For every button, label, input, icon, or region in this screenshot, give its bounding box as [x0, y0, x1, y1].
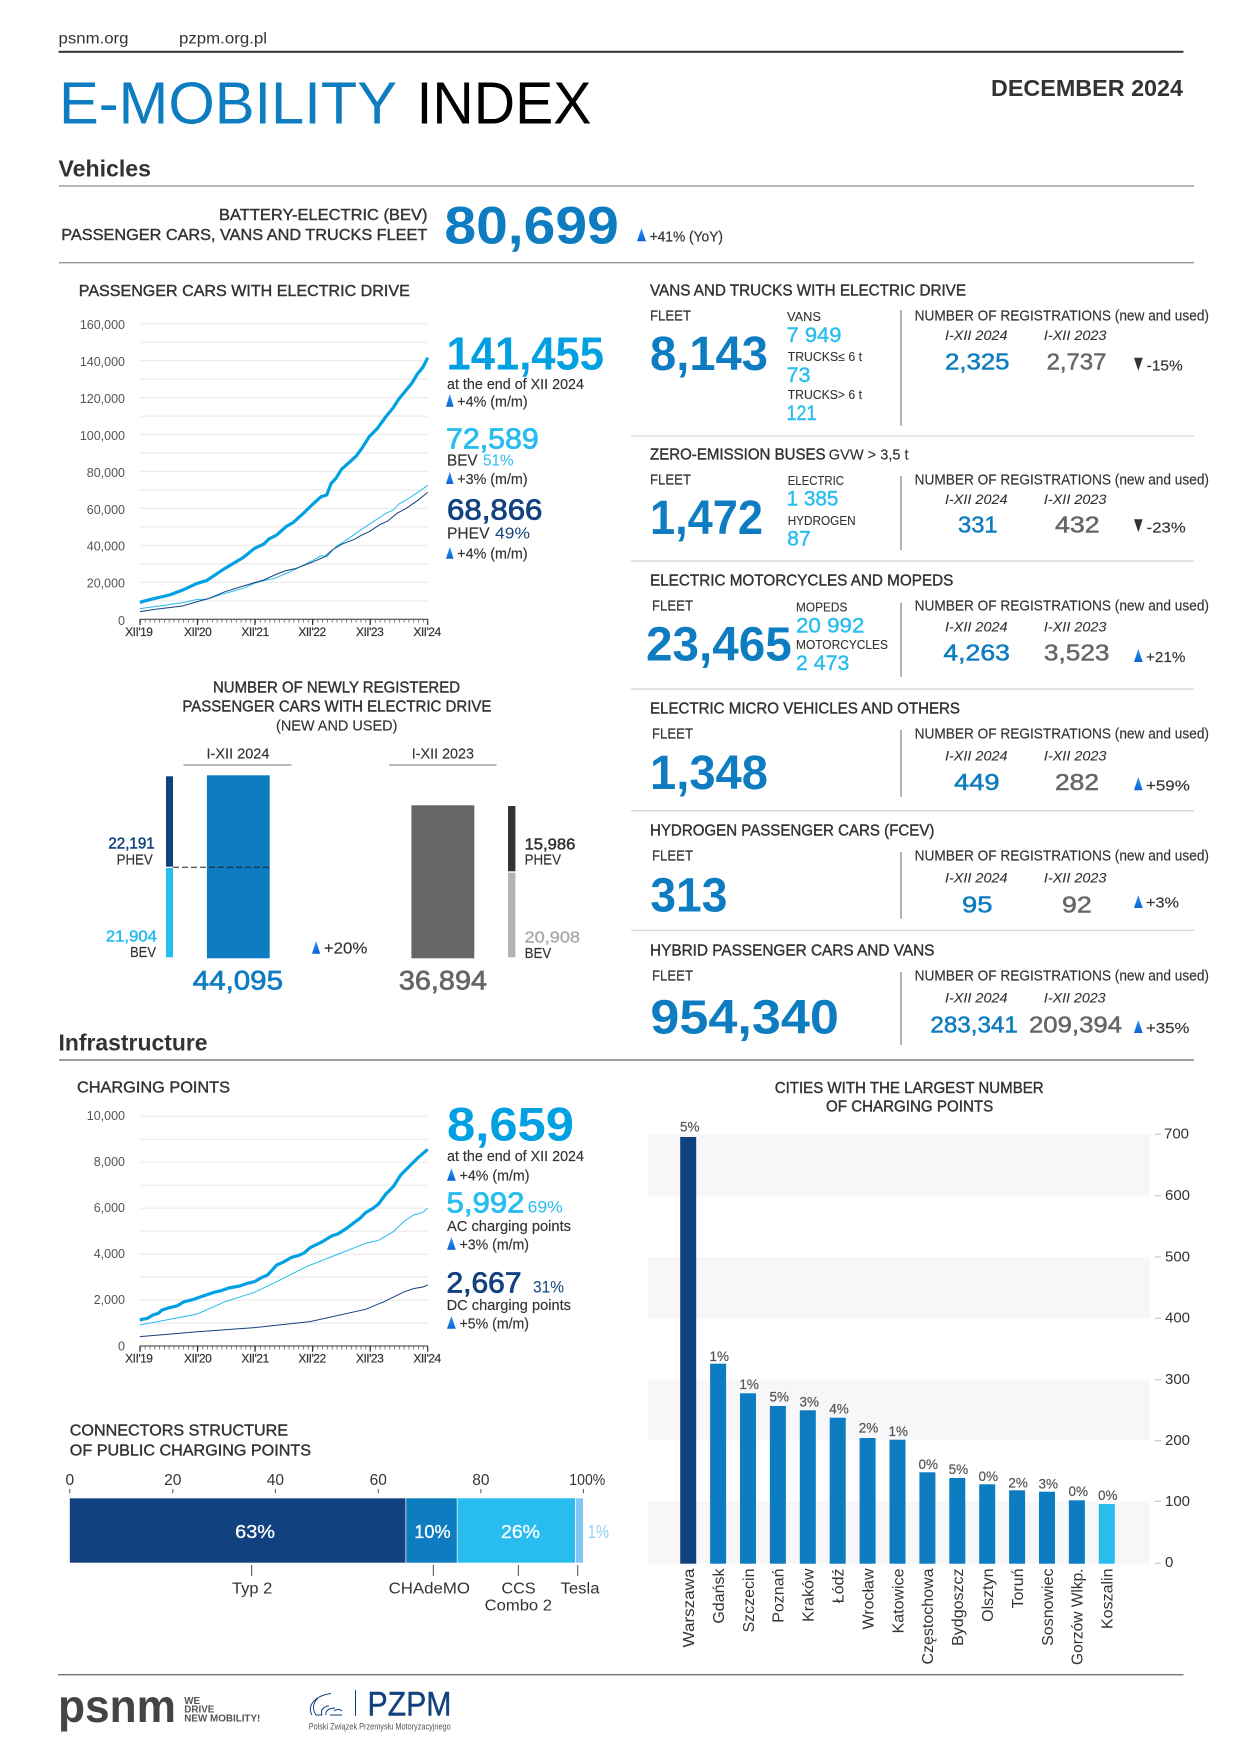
stat: AC charging points: AC charging points	[447, 1219, 571, 1235]
line chart: charging points: XII'23	[356, 1351, 384, 1365]
stacked bar chart: 80	[472, 1472, 490, 1489]
stat: PHEV	[446, 494, 542, 563]
stacked bar chart: 26%	[501, 1521, 540, 1542]
panel: zero-emission buses: 1,472	[650, 492, 763, 545]
stacked bar chart: CCS	[502, 1581, 536, 1598]
line chart: charging points: XII'24	[413, 1351, 441, 1365]
panel: motorcycles and mopeds: I-XII 2024	[945, 618, 1008, 634]
stat: DC charging points: +5% (m/m)	[460, 1317, 529, 1333]
bar chart: cities: 3%	[1039, 1477, 1058, 1492]
panel: motorcycles and mopeds: 20 992	[796, 615, 864, 638]
panel: vans and trucks	[650, 282, 1209, 426]
bar chart: cities: Gorzów Wlkp.	[1070, 1568, 1087, 1665]
panel: connectors structure: OF PUBLIC CHARGING POINTS	[70, 1442, 311, 1459]
panel: hydrogen cars: 313	[650, 870, 727, 923]
panel: vans and trucks: -15%	[1147, 358, 1183, 375]
bar chart: cities: Katowice	[890, 1568, 907, 1633]
panel: cities: CITIES WITH THE LARGEST NUMBER	[775, 1080, 1044, 1097]
panel: hybrid cars and vans: NUMBER OF REGISTRATIONS (new and used)	[915, 967, 1209, 984]
bar 2024: PHEV	[117, 852, 153, 869]
bar chart: cities: 300	[1165, 1371, 1190, 1388]
panel: hydrogen cars	[650, 823, 1209, 923]
website links: psnm.org	[58, 30, 128, 47]
line chart: passenger cars: 40,000	[87, 540, 125, 554]
panel: micro vehicles: 449	[954, 769, 1000, 795]
panel: connectors structure: CONNECTORS STRUCTURE	[70, 1423, 288, 1440]
bar chart: cities: 0%	[1068, 1484, 1088, 1499]
logo: PZPM: PZPM	[368, 1686, 452, 1724]
panel: cities: OF CHARGING POINTS	[826, 1099, 993, 1116]
bar 2023: 20,908	[525, 930, 580, 946]
line chart: passenger cars: 160,000	[80, 318, 125, 332]
panel: hybrid cars and vans: 209,394	[1029, 1012, 1122, 1038]
panel: vans and trucks: VANS	[787, 310, 821, 324]
line chart: charging points: XII'22	[298, 1351, 326, 1365]
bar chart: cities: Poznań	[771, 1568, 788, 1623]
website links	[58, 30, 267, 47]
panel: micro vehicles: ELECTRIC MICRO VEHICLES AND OTHERS	[650, 701, 960, 718]
website links: pzpm.org.pl	[179, 30, 267, 47]
panel: micro vehicles: I-XII 2023	[1044, 748, 1107, 764]
bar chart: cities: Koszalin	[1100, 1568, 1117, 1629]
panel: motorcycles and mopeds: FLEET	[652, 597, 693, 614]
bar 2023: 36,894	[399, 965, 487, 995]
bar 2023: 15,986	[525, 836, 575, 853]
line chart: passenger cars: 80,000	[87, 466, 125, 480]
panel: hybrid cars and vans: I-XII 2023	[1044, 990, 1106, 1006]
panel: hydrogen cars: NUMBER OF REGISTRATIONS (new and used)	[915, 847, 1209, 864]
line chart: charging points: 10,000	[87, 1109, 125, 1123]
panel: motorcycles and mopeds: I-XII 2023	[1044, 618, 1107, 634]
line chart: passenger cars: XII'19	[125, 625, 153, 639]
panel: hybrid cars and vans: +35%	[1146, 1020, 1189, 1037]
panel: micro vehicles: 1,348	[650, 747, 768, 800]
title	[59, 70, 592, 136]
line chart: charging points: 0	[118, 1339, 125, 1353]
line chart: passenger cars	[80, 318, 441, 639]
stacked bar chart: Typ 2	[232, 1581, 272, 1598]
stat: total charging points: 8,659	[447, 1098, 574, 1151]
bar 2023	[399, 805, 580, 995]
bar chart: cities: Sosnowiec	[1040, 1568, 1057, 1646]
panel: vans and trucks: TRUCKS≤ 6 t	[788, 350, 863, 364]
panel: micro vehicles: 282	[1055, 769, 1099, 795]
panel: motorcycles and mopeds: ELECTRIC MOTORCYCLES AND MOPEDS	[650, 573, 953, 590]
panel: newly registered passenger cars: I-XII 2024	[206, 746, 269, 763]
bar chart: cities: Wrocław	[860, 1568, 877, 1630]
panel: hydrogen cars: I-XII 2023	[1044, 870, 1107, 886]
panel: motorcycles and mopeds: 23,465	[646, 619, 792, 672]
bar chart: cities: Olsztyn	[980, 1568, 997, 1622]
logo: psnm: NEW MOBILITY!	[184, 1713, 260, 1724]
stat: AC charging points: 5,992	[446, 1188, 524, 1220]
panel: hybrid cars and vans: I-XII 2024	[945, 990, 1008, 1006]
stacked bar chart: 10%	[414, 1521, 451, 1542]
panel: motorcycles and mopeds: +21%	[1146, 649, 1185, 666]
panel: zero-emission buses: ELECTRIC	[788, 474, 844, 488]
stacked bar chart: 20	[164, 1472, 182, 1489]
bar chart: cities: 400	[1165, 1310, 1190, 1327]
stat: total: 141,455	[446, 327, 604, 379]
panel: zero-emission buses: NUMBER OF REGISTRATIONS (new and used)	[915, 471, 1209, 488]
stacked bar chart: 63%	[235, 1521, 275, 1542]
bar 2024: 44,095	[193, 965, 283, 995]
panel: hydrogen cars: HYDROGEN PASSENGER CARS (FCEV)	[650, 823, 934, 840]
panel: passenger cars with electric drive: PASSENGER CARS WITH ELECTRIC DRIVE	[79, 283, 410, 300]
panel: motorcycles and mopeds: 2 473	[796, 652, 849, 675]
panel: micro vehicles: FLEET	[652, 725, 693, 742]
line chart: passenger cars: 0	[118, 614, 125, 628]
panel: zero-emission buses: 1 385	[786, 488, 838, 511]
bar 2023: PHEV	[525, 852, 561, 869]
bar chart: cities: 200	[1165, 1432, 1190, 1449]
bar 2024: 21,904	[106, 929, 157, 946]
stat: BEV: 72,589	[446, 423, 539, 455]
panel: vans and trucks: 73	[786, 364, 810, 387]
panel: vans and trucks: I-XII 2023	[1044, 327, 1107, 343]
line chart: charging points: XII'20	[184, 1351, 212, 1365]
panel: charging points: CHARGING POINTS	[77, 1080, 230, 1097]
panel: zero-emission buses: 87	[787, 527, 811, 550]
panel: motorcycles and mopeds: MOPEDS	[796, 601, 847, 615]
bar chart: cities: 5%	[949, 1462, 968, 1477]
logo: psnm: WE	[184, 1696, 200, 1707]
line chart: passenger cars: XII'22	[298, 625, 326, 639]
panel: hydrogen cars: FLEET	[652, 847, 693, 864]
bar chart: cities: 0%	[918, 1457, 938, 1472]
panel: vans and trucks: 2,325	[945, 348, 1010, 374]
panel: micro vehicles: I-XII 2024	[945, 748, 1008, 764]
panel: micro vehicles: NUMBER OF REGISTRATIONS (new and used)	[915, 725, 1209, 742]
header	[58, 30, 1184, 136]
line chart: charging points: 4,000	[94, 1247, 125, 1261]
panel: micro vehicles	[650, 701, 1209, 800]
panel: zero-emission buses	[650, 447, 1209, 550]
stacked bar chart: 1%	[588, 1521, 609, 1542]
bar 2023: BEV	[525, 945, 551, 962]
bar chart: cities: Gdańsk	[711, 1568, 728, 1624]
title: INDEX	[416, 70, 592, 136]
logo: psnm: DRIVE	[184, 1705, 215, 1716]
bar chart: cities: 0%	[979, 1469, 998, 1484]
headline stat: BEV fleet: 80,699	[444, 196, 619, 255]
panel: motorcycles and mopeds: 4,263	[943, 640, 1010, 666]
stat: BEV: 51%	[483, 453, 514, 470]
panel: vans and trucks: FLEET	[650, 307, 691, 324]
panel: motorcycles and mopeds: MOTORCYCLES	[796, 638, 888, 652]
bar chart: cities: Bydgoszcz	[950, 1568, 967, 1646]
panel: cities	[648, 1080, 1190, 1665]
bar chart: cities	[648, 1120, 1190, 1665]
bar chart: cities: 1%	[889, 1424, 908, 1439]
panel: connectors structure	[65, 1423, 609, 1614]
panel: passenger cars with electric drive	[79, 283, 604, 639]
panel: motorcycles and mopeds: NUMBER OF REGISTRATIONS (new and used)	[915, 597, 1209, 614]
stacked bar chart	[65, 1472, 609, 1614]
line chart: charging points: 6,000	[94, 1201, 125, 1215]
logo: psnm	[58, 1680, 260, 1732]
change indicator: +20%	[324, 941, 368, 958]
chart title	[182, 680, 491, 734]
panel: hybrid cars and vans: 283,341	[930, 1012, 1018, 1038]
bar chart: cities: Warszawa	[681, 1568, 698, 1648]
line chart: passenger cars: XII'21	[241, 625, 269, 639]
stat: total	[446, 327, 604, 411]
stat: BEV	[446, 423, 539, 488]
panel: motorcycles and mopeds	[646, 573, 1209, 677]
line chart: passenger cars: XII'20	[184, 625, 212, 639]
stacked bar chart: Tesla	[560, 1581, 600, 1598]
panel: micro vehicles: +59%	[1146, 777, 1190, 794]
panel: motorcycles and mopeds: 3,523	[1044, 640, 1110, 666]
stat: DC charging points: DC charging points	[447, 1298, 571, 1314]
line chart: passenger cars: XII'24	[413, 625, 441, 639]
bar 2024: BEV	[130, 944, 156, 961]
line chart: charging points: 2,000	[94, 1293, 125, 1307]
panel: zero-emission buses: FLEET	[650, 471, 691, 488]
bar chart: cities: 500	[1165, 1248, 1190, 1265]
panel: hydrogen cars: +3%	[1146, 894, 1179, 911]
headline stat: BEV fleet	[61, 196, 723, 255]
panel: vans and trucks: 121	[786, 402, 816, 425]
stat: AC charging points: +3% (m/m)	[460, 1238, 529, 1254]
bar chart: cities: 2%	[859, 1421, 878, 1436]
stat: PHEV: PHEV	[447, 526, 490, 543]
line chart: charging points	[87, 1109, 441, 1365]
chart title: (NEW AND USED)	[276, 717, 397, 734]
panel: hydrogen cars: I-XII 2024	[945, 870, 1008, 886]
stacked bar chart: CHAdeMO	[389, 1581, 470, 1598]
panel: zero-emission buses: 432	[1055, 512, 1100, 538]
panel: zero-emission buses: GVW > 3,5 t	[829, 447, 909, 464]
stacked bar chart: 0	[65, 1472, 74, 1489]
panel: hydrogen cars: 92	[1062, 892, 1092, 918]
panel: zero-emission buses: 331	[958, 512, 998, 538]
stacked bar chart: 40	[267, 1472, 284, 1489]
bar chart: cities: 0	[1165, 1554, 1173, 1571]
panel: hydrogen cars: 95	[962, 892, 992, 918]
bar chart: cities: 1%	[709, 1349, 729, 1364]
bar chart: cities: 1%	[739, 1377, 759, 1392]
bar chart: cities: 2%	[1008, 1475, 1028, 1490]
line chart: passenger cars: 60,000	[87, 503, 125, 517]
stat: total: at the end of XII 2024	[447, 377, 584, 393]
chart title: PASSENGER CARS WITH ELECTRIC DRIVE	[182, 699, 491, 716]
line chart: passenger cars: XII'23	[356, 625, 384, 639]
headline stat: BEV fleet: +41% (YoY)	[650, 228, 723, 245]
stacked bar chart: Combo 2	[485, 1597, 552, 1614]
bar chart: cities: Szczecin	[741, 1568, 758, 1633]
panel: vans and trucks: TRUCKS> 6 t	[788, 388, 863, 402]
stacked bar chart: 60	[370, 1472, 387, 1489]
bar chart: cities: Częstochowa	[920, 1568, 937, 1665]
panel: hybrid cars and vans	[650, 943, 1209, 1045]
panel: vans and trucks: VANS AND TRUCKS WITH ELECTRIC DRIVE	[650, 282, 966, 300]
bar chart: cities: 5%	[680, 1120, 700, 1135]
logo: PZPM	[309, 1686, 452, 1732]
line chart: passenger cars: 120,000	[80, 392, 125, 406]
stat: BEV: +3% (m/m)	[457, 472, 528, 488]
chart title: NUMBER OF NEWLY REGISTERED	[213, 680, 460, 697]
panel: zero-emission buses: I-XII 2023	[1044, 491, 1107, 507]
bar 2024: 22,191	[108, 836, 155, 853]
bar chart: cities: 5%	[770, 1390, 789, 1405]
line chart: passenger cars: 140,000	[80, 355, 125, 369]
stat: AC charging points	[446, 1188, 571, 1254]
date: DECEMBER 2024	[991, 75, 1183, 101]
bar chart: cities: Kraków	[801, 1568, 818, 1622]
logo: psnm: psnm	[58, 1680, 176, 1732]
panel: hybrid cars and vans: FLEET	[652, 967, 693, 984]
line chart: charging points: XII'19	[125, 1351, 153, 1365]
stat: DC charging points: 2,667	[446, 1267, 522, 1299]
bar chart: cities: Łódź	[830, 1568, 848, 1603]
panel: zero-emission buses: -23%	[1147, 519, 1186, 536]
panel: vans and trucks: 2,737	[1047, 348, 1106, 374]
stat: PHEV: 68,866	[447, 494, 542, 526]
panel: hybrid cars and vans: HYBRID PASSENGER CARS AND VANS	[650, 943, 934, 960]
line chart: passenger cars: 20,000	[87, 577, 125, 591]
bar chart: cities: Toruń	[1010, 1568, 1027, 1609]
bar chart: cities: 4%	[829, 1402, 849, 1417]
panel: zero-emission buses: ZERO-EMISSION BUSES	[650, 447, 826, 464]
bar chart: cities: 700	[1164, 1125, 1189, 1142]
panel: vans and trucks: 8,143	[650, 328, 768, 381]
stat: total charging points	[447, 1098, 584, 1185]
bar chart: cities: 100	[1165, 1493, 1190, 1510]
title: E-MOBILITY	[59, 70, 397, 136]
bar chart: cities: 3%	[799, 1395, 819, 1410]
panel: newly registered passenger cars	[106, 680, 580, 995]
stat: PHEV: 49%	[495, 526, 530, 543]
stat: AC charging points: 69%	[528, 1198, 563, 1217]
panel: hybrid cars and vans: 954,340	[650, 991, 839, 1044]
panel: charging points	[77, 1080, 584, 1365]
stat: PHEV: +4% (m/m)	[457, 547, 528, 563]
stat: total charging points: +4% (m/m)	[460, 1169, 530, 1185]
bar chart: cities: 600	[1165, 1187, 1190, 1204]
panel: zero-emission buses: HYDROGEN	[788, 514, 856, 528]
stat: total charging points: at the end of XII 2024	[447, 1149, 584, 1165]
panel: vans and trucks: NUMBER OF REGISTRATIONS (new and used)	[915, 307, 1209, 324]
line chart: charging points: 8,000	[94, 1155, 125, 1169]
bar chart: cities: 0%	[1098, 1488, 1117, 1503]
stat: DC charging points	[446, 1267, 571, 1333]
bar 2024	[106, 775, 283, 995]
stat: BEV: BEV	[447, 453, 478, 470]
headline stat: BEV fleet: BATTERY-ELECTRIC (BEV)	[219, 207, 428, 224]
panel: vans and trucks: 7 949	[786, 324, 842, 347]
panel: zero-emission buses: I-XII 2024	[945, 491, 1008, 507]
panel: newly registered passenger cars: I-XII 2023	[412, 746, 474, 763]
line chart: passenger cars: 100,000	[80, 429, 125, 443]
stacked bar chart: 100%	[569, 1472, 605, 1489]
footer	[58, 1674, 1184, 1732]
headline stat: BEV fleet: PASSENGER CARS, VANS AND TRUCKS FLEET	[61, 227, 428, 244]
section heading: infrastructure: Infrastructure	[58, 1030, 208, 1056]
line chart: charging points: XII'21	[241, 1351, 269, 1365]
stat: DC charging points: 31%	[533, 1277, 564, 1296]
panel: vans and trucks: I-XII 2024	[945, 327, 1008, 343]
stat: total: +4% (m/m)	[457, 395, 528, 411]
logo: PZPM: Polski Związek Przemysłu Motoryzacyjnego	[309, 1721, 451, 1732]
section heading: vehicles: Vehicles	[58, 156, 151, 182]
